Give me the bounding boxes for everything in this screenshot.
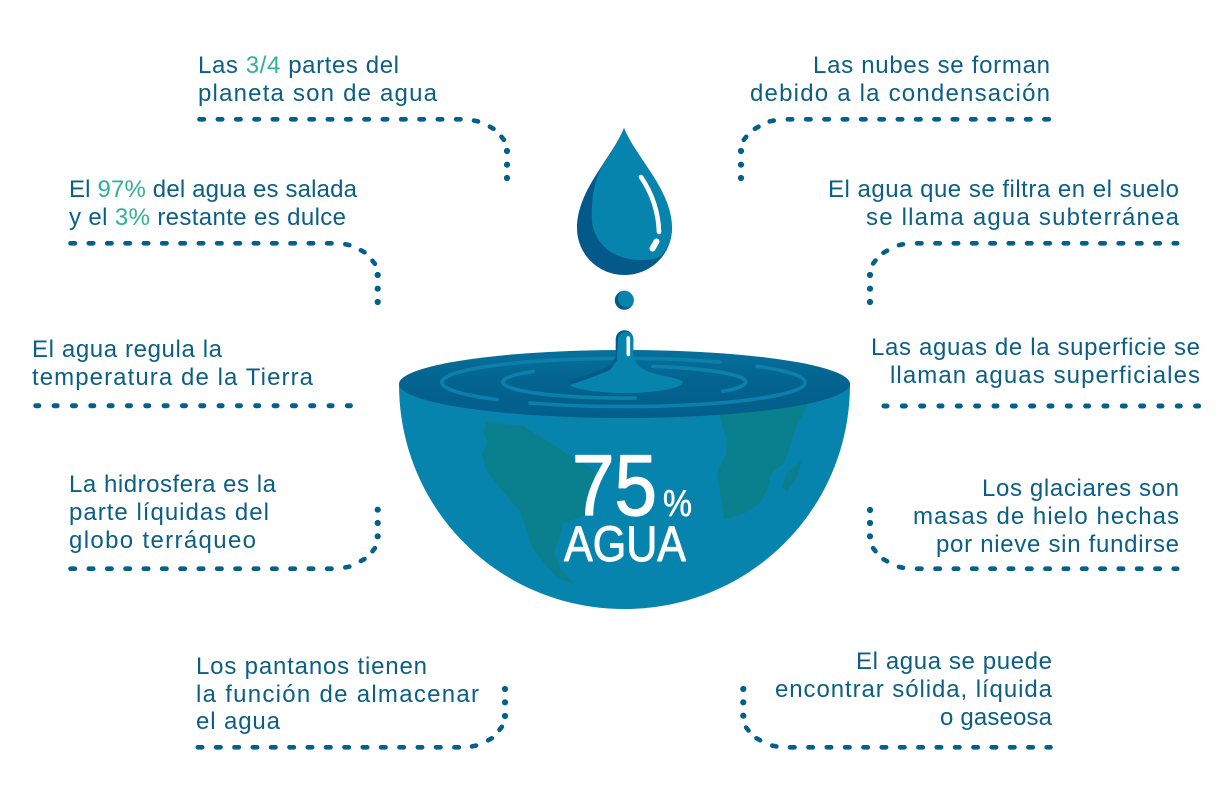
panel: glaciares — [870, 475, 1179, 569]
icon: falling water drop — [577, 128, 672, 275]
panel: agua subterránea — [828, 176, 1180, 302]
panel: pantanos — [196, 653, 505, 747]
text: nubes — [750, 52, 1050, 107]
text: aguas superficiales: llaman aguas superficiales — [890, 362, 1200, 389]
text: glaciares: por nieve sin fundirse — [936, 531, 1179, 558]
text: 3/4 del planeta: Las 3/4 partes del — [198, 52, 399, 79]
water surface — [399, 350, 850, 418]
panel: aguas superficiales — [871, 334, 1200, 406]
text: hidrosfera: parte líquidas del — [69, 499, 269, 526]
text: aguas superficiales — [871, 334, 1200, 389]
label: 75% agua: AGUA — [564, 516, 687, 572]
text: agua subterránea — [828, 176, 1180, 231]
text: 3/4 del planeta: planeta son de agua — [198, 80, 438, 107]
text: hidrosfera: globo terráqueo — [69, 527, 256, 554]
text: glaciares — [913, 475, 1179, 558]
connector: agua subterránea — [870, 243, 1177, 302]
label: 75% agua: % — [663, 483, 692, 524]
water ripples — [442, 358, 805, 407]
connector: glaciares — [870, 510, 1177, 569]
text: agua salada y dulce: El 97% del agua es salada — [69, 176, 358, 203]
text: estados del agua: encontrar sólida, líquida — [775, 676, 1053, 703]
text: pantanos: la función de almacenar — [196, 681, 479, 708]
text: glaciares: Los glaciares son — [982, 475, 1179, 502]
text: estados del agua — [775, 648, 1053, 731]
label: 75% agua: 75 — [572, 438, 657, 534]
globe body — [399, 384, 850, 609]
text: regula la temperatura — [32, 336, 314, 391]
text: agua salada y dulce: y el 3% restante es dulce — [69, 204, 346, 231]
continent: South America — [483, 423, 593, 583]
text: pantanos — [196, 653, 479, 735]
continent: Madagascar — [782, 460, 802, 492]
text: agua subterránea: se llama agua subterránea — [866, 204, 1180, 231]
icon: small droplet — [614, 290, 634, 310]
connector: agua salada y dulce — [70, 243, 378, 302]
connector: estados del agua — [743, 689, 1050, 747]
text: agua salada y dulce — [69, 176, 358, 231]
text: pantanos: el agua — [196, 708, 281, 735]
panel: 3/4 del planeta — [198, 52, 507, 178]
panel: estados del agua — [743, 648, 1053, 747]
icon: half globe with water surface — [399, 330, 850, 609]
connector: pantanos — [198, 689, 505, 747]
connector: hidrosfera — [70, 510, 378, 569]
text: nubes: Las nubes se forman — [813, 52, 1050, 79]
panel: regula la temperatura — [32, 336, 351, 406]
panel: nubes — [741, 52, 1050, 178]
label: 75% agua — [564, 438, 692, 572]
text: estados del agua: El agua se puede — [856, 648, 1052, 675]
text: nubes: debido a la condensación — [750, 80, 1050, 107]
splash column — [567, 330, 683, 393]
text: estados del agua: o gaseosa — [940, 704, 1053, 731]
text: pantanos: Los pantanos tienen — [196, 653, 427, 680]
text: 3/4 del planeta — [198, 52, 438, 107]
text: glaciares: masas de hielo hechas — [913, 503, 1179, 530]
panel: agua salada y dulce — [69, 176, 378, 302]
text: aguas superficiales: Las aguas de la superficie se — [871, 334, 1200, 361]
connector: nubes — [741, 119, 1049, 178]
text: hidrosfera: La hidrosfera es la — [69, 471, 277, 498]
panel: hidrosfera — [69, 471, 378, 569]
connector: regula la temperatura — [36, 403, 351, 408]
connector: 3/4 del planeta — [200, 119, 507, 178]
text: regula la temperatura: temperatura de la Tierra — [32, 364, 314, 391]
connector: aguas superficiales — [884, 404, 1199, 408]
text: hidrosfera — [69, 471, 277, 554]
text: regula la temperatura: El agua regula la — [32, 336, 223, 363]
text: agua subterránea: El agua que se filtra en el suelo — [828, 176, 1179, 203]
continent: Africa — [718, 405, 807, 518]
